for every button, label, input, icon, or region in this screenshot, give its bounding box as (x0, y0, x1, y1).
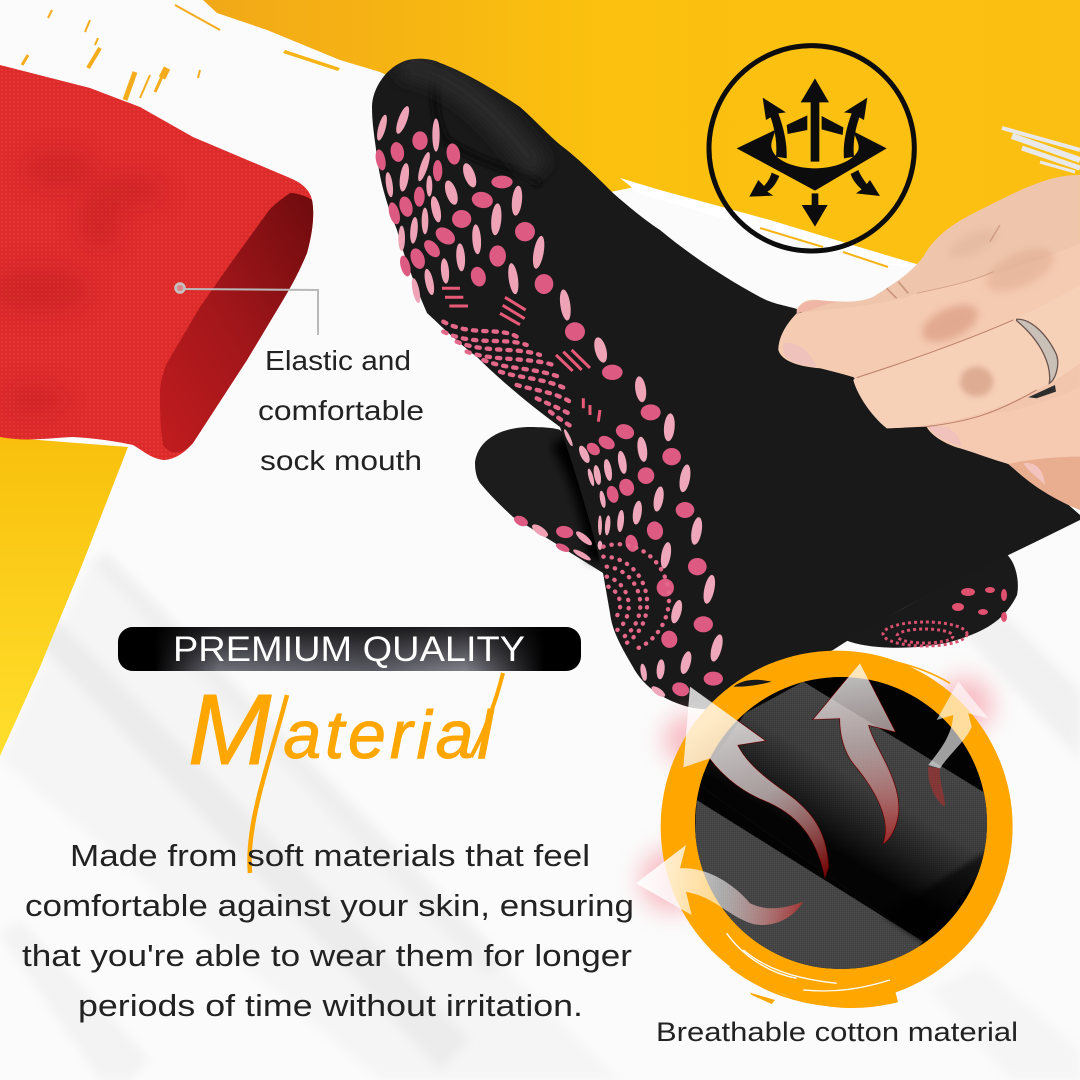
finger creases (857, 225, 1037, 427)
orange brush ring (661, 651, 1013, 1006)
arrow outlines inside circle (710, 677, 900, 879)
yellow scratches top left (22, 5, 220, 100)
arrow: left upper (683, 687, 828, 877)
sock grip dots upper (374, 105, 648, 427)
body text: that you're able to wear them for longer (22, 938, 632, 973)
sock grip spiral (603, 544, 669, 650)
callout text: elastic sock mouth (258, 345, 424, 476)
yellow brush area top right (203, 0, 1080, 312)
body text: Made from soft materials that feel (70, 838, 590, 873)
body text: comfortable against your skin, ensuring (25, 888, 634, 923)
callout line (176, 284, 318, 335)
sock: rear heel (475, 427, 603, 573)
callout text: elastic sock mouth: Elastic and (265, 345, 411, 376)
heading: Material script: M (188, 674, 272, 786)
body text (22, 838, 634, 1023)
arrows (636, 663, 988, 925)
hand (778, 175, 1080, 510)
body text: periods of time without irritation. (78, 988, 583, 1023)
arrow: left lower (636, 845, 803, 925)
sock grip dots lower (563, 404, 725, 699)
pill: premium quality: PREMIUM QUALITY (173, 630, 525, 669)
fabric circle: breathable cotton (636, 651, 1013, 1006)
callout text: elastic sock mouth: comfortable (258, 395, 424, 426)
icon: multi-direction stretch badge (709, 46, 914, 251)
red sock mouth (0, 65, 313, 460)
arrow: center upper (813, 663, 899, 843)
heel grip dots (512, 514, 594, 562)
fabric (695, 677, 987, 969)
sock: rear far foot (845, 553, 1018, 648)
knuckle shading (916, 223, 1060, 397)
caption: breathable cotton material: Breathable cotton material (656, 1017, 1018, 1047)
ring (1017, 319, 1058, 383)
heading: Material script: aterial (283, 697, 497, 773)
red glow around arrows (640, 677, 993, 912)
pill: premium quality (118, 627, 581, 671)
nails (783, 343, 817, 367)
dense grip rows (443, 322, 572, 427)
heading: Material script (188, 673, 503, 873)
arrow: right upper (928, 682, 988, 768)
callout text: elastic sock mouth: sock mouth (260, 445, 422, 476)
sock: main black sock (372, 59, 1080, 710)
yellow brush area bottom left (0, 437, 128, 756)
